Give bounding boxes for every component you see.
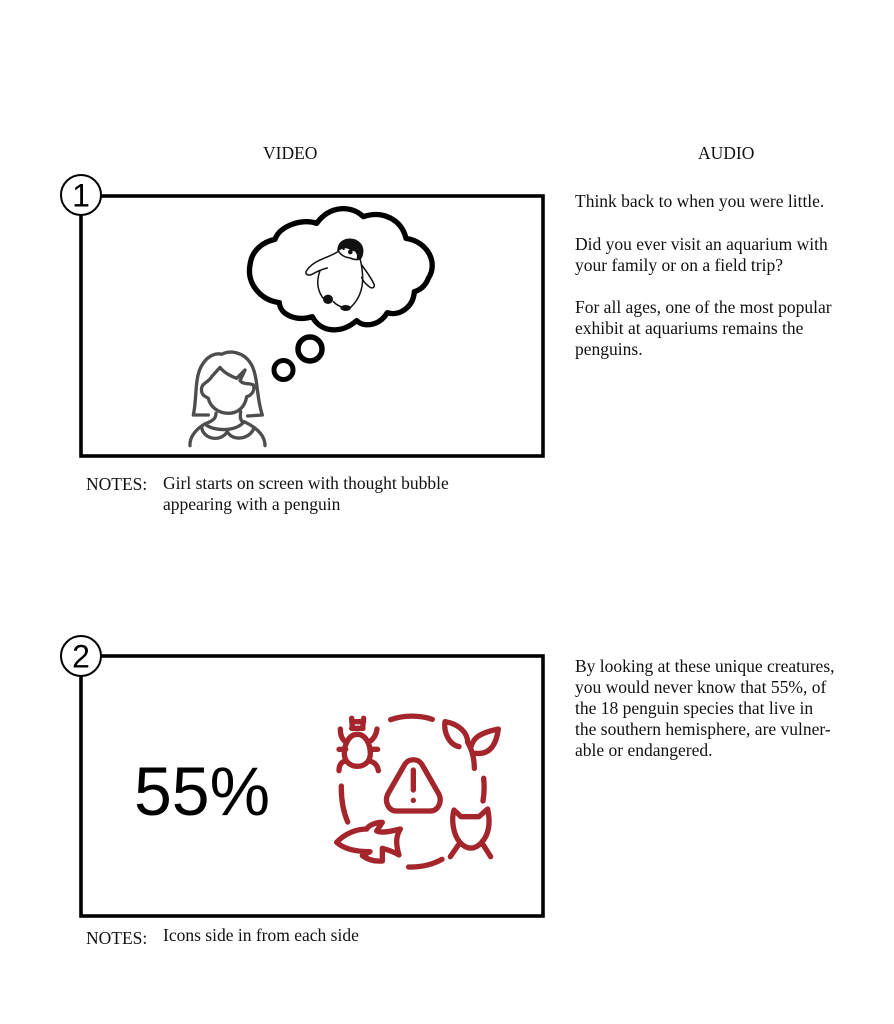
- badge: scene number 2: [61, 636, 101, 676]
- notes: scene 2: Icons side in from each side: [163, 925, 359, 945]
- audio text: scene 1: exhibit at aquariums remains the: [575, 318, 804, 338]
- fish: [337, 822, 400, 861]
- audio text: scene 2: able or endangered.: [575, 740, 712, 760]
- audio text: scene 2: By looking at these unique creatures,: [575, 656, 835, 676]
- badge: scene number 2: 2: [72, 638, 90, 674]
- notes: scene 1: NOTES:: [86, 474, 147, 494]
- dashed ring: [341, 716, 484, 867]
- thought bubble cloud: [249, 209, 432, 330]
- audio text: scene 1: penguins.: [575, 339, 643, 359]
- audio text: scene 1: For all ages, one of the most popular: [575, 297, 832, 317]
- notes: scene 2: NOTES:: [86, 928, 147, 948]
- cat: [453, 809, 489, 848]
- warning triangle: [386, 760, 440, 811]
- thought bubble small circle: [274, 360, 293, 380]
- panel: scene 2 video frame: [81, 656, 543, 916]
- badge: scene number 1: 1: [72, 178, 90, 214]
- notes: scene 1: [86, 473, 449, 514]
- icon: girl: [190, 352, 265, 446]
- icon: endangered species cycle: [337, 716, 498, 867]
- audio text: scene 2: the southern hemisphere, are vulner-: [575, 719, 831, 739]
- statistic: 55 percent: 55%: [134, 753, 270, 830]
- audio text: scene 2: you would never know that 55%, of: [575, 677, 826, 697]
- audio text: scene 2: [575, 656, 835, 760]
- notes: scene 2: [86, 925, 359, 948]
- notes: scene 1: appearing with a penguin: [163, 494, 341, 514]
- notes: scene 1: Girl starts on screen with thought bubble: [163, 473, 449, 493]
- badge: scene number 1: [61, 175, 101, 215]
- heading: video column: VIDEO: [263, 143, 317, 163]
- audio text: scene 1: your family or on a field trip?: [575, 255, 783, 275]
- heading: audio column: AUDIO: [698, 143, 754, 163]
- audio text: scene 1: Did you ever visit an aquarium with: [575, 234, 828, 254]
- plant: [445, 722, 474, 768]
- audio text: scene 1: Think back to when you were little.: [575, 191, 824, 211]
- icon: penguin: [306, 239, 374, 311]
- audio text: scene 1: [575, 191, 832, 359]
- panel: scene 1 video frame: [81, 196, 543, 456]
- audio text: scene 2: the 18 penguin species that live in: [575, 698, 813, 718]
- bug: [344, 734, 370, 766]
- thought bubble large circle: [298, 337, 322, 361]
